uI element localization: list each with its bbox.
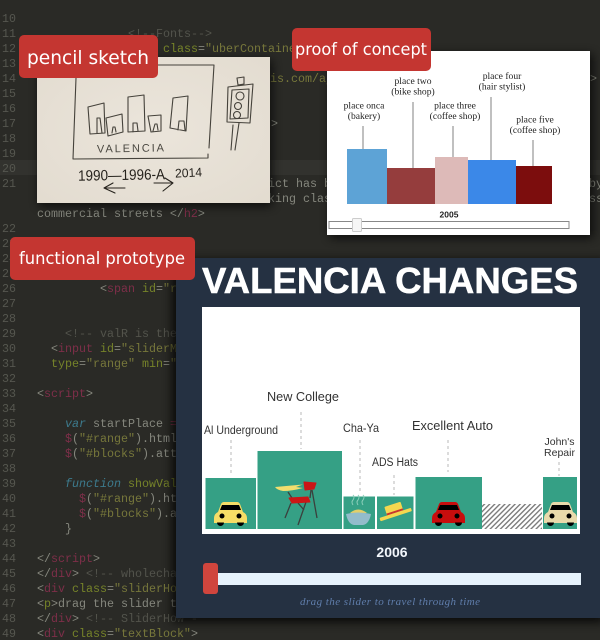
- label: pencil sketch: pencil sketch: [27, 47, 149, 69]
- hatched vacancy: [482, 504, 542, 529]
- panel: pencil sketch: [37, 57, 272, 206]
- icon: cream car: [544, 502, 577, 526]
- line numbers: 47: [2, 597, 16, 611]
- line numbers: 12: [2, 42, 16, 56]
- icon: red car: [432, 502, 465, 526]
- line numbers: 45: [2, 567, 16, 581]
- code text: var startPlace =: [65, 417, 177, 431]
- place labels: (bakery): [348, 111, 380, 122]
- line numbers: 21: [2, 177, 16, 191]
- code text: }: [65, 522, 72, 536]
- label: proof of concept: [292, 28, 431, 71]
- panel: functional prototype: [172, 258, 600, 622]
- code text: <input id="sliderM: [51, 342, 177, 356]
- line numbers: 41: [2, 507, 16, 521]
- line numbers: 11: [2, 27, 16, 41]
- line numbers: 29: [2, 327, 16, 341]
- code text: <p>drag the slider t: [37, 597, 177, 611]
- code text: king clas: [268, 192, 331, 206]
- year label: 2005: [440, 210, 459, 220]
- store labels: Excellent Auto: [412, 418, 493, 433]
- line numbers: 35: [2, 417, 16, 431]
- code text: >: [590, 72, 597, 86]
- line numbers: 16: [2, 102, 16, 116]
- sketch timeline: 1990—1996-A: [78, 166, 165, 185]
- place labels: place two: [394, 76, 432, 87]
- line numbers: 34: [2, 402, 16, 416]
- line numbers: 26: [2, 282, 16, 296]
- title: VALENCIA CHANGES: [202, 260, 578, 301]
- bars: [347, 149, 552, 204]
- line numbers: 30: [2, 342, 16, 356]
- code text: </script>: [37, 552, 100, 566]
- line numbers: 22: [2, 222, 16, 236]
- line numbers: 14: [2, 72, 16, 86]
- leader lines: [363, 97, 533, 168]
- store blocks: [206, 451, 577, 529]
- code text: </div> <!-- wholecha: [37, 567, 177, 581]
- icon: noodle bowl: [346, 495, 371, 525]
- place labels: (coffee shop): [430, 111, 480, 122]
- line numbers: 39: [2, 477, 16, 491]
- code text: function showVal: [65, 477, 177, 491]
- line numbers: 23: [2, 237, 16, 251]
- code text: $("#blocks").att: [65, 447, 177, 461]
- slider caption: drag the slider to travel through time: [300, 596, 480, 608]
- line numbers: 20: [2, 162, 16, 176]
- code text: <!--Fonts-->: [128, 27, 212, 41]
- line numbers: 36: [2, 432, 16, 446]
- place labels: (bike shop): [391, 86, 435, 98]
- line numbers: 15: [2, 87, 16, 101]
- panel: proof of concept: [327, 51, 593, 238]
- place labels: place five: [516, 114, 554, 126]
- year label: 2006: [376, 544, 408, 560]
- line numbers: 10: [2, 12, 16, 26]
- code text: <script>: [37, 387, 93, 401]
- place labels: place four: [483, 71, 522, 82]
- line numbers: 17: [2, 117, 16, 131]
- code text: $("#blocks").a: [79, 507, 177, 521]
- line numbers: 25: [2, 267, 16, 281]
- place labels: place three: [434, 100, 476, 112]
- line numbers: 38: [2, 462, 16, 476]
- slider: [329, 218, 569, 232]
- line numbers: 28: [2, 312, 16, 326]
- sketch traffic light: [227, 77, 253, 150]
- line numbers: 13: [2, 57, 16, 71]
- place labels: [344, 71, 560, 136]
- code text: $("#range").html: [65, 432, 177, 446]
- line numbers: 27: [2, 297, 16, 311]
- line numbers: 46: [2, 582, 16, 596]
- label: functional prototype: [10, 237, 195, 280]
- sketch arrows: [104, 178, 173, 193]
- line numbers: 33: [2, 387, 16, 401]
- code text: <!-- valR is the: [65, 327, 177, 341]
- panel: pencil sketch: 2014: [175, 165, 202, 181]
- line numbers: 42: [2, 522, 16, 536]
- store labels: Al Underground: [204, 423, 278, 437]
- line numbers: 24: [2, 252, 16, 266]
- place labels: (hair stylist): [479, 82, 525, 92]
- code text: is.com/aj: [270, 72, 333, 86]
- place labels: place onca: [344, 100, 385, 112]
- code text: <span id="r: [100, 282, 177, 296]
- code text: commercial streets </h2>: [37, 207, 205, 221]
- line numbers: 18: [2, 132, 16, 146]
- label: pencil sketch: [19, 35, 158, 78]
- code text: ict has b: [268, 177, 331, 191]
- code text: type="range" min=": [51, 357, 177, 371]
- icon: yellow car: [214, 502, 247, 526]
- line numbers: 32: [2, 372, 16, 386]
- sketch buildings: [88, 95, 188, 136]
- line numbers: 37: [2, 447, 16, 461]
- label: proof of concept: proof of concept: [295, 40, 427, 60]
- line numbers: 44: [2, 552, 16, 566]
- icon: school desk chair: [275, 482, 317, 525]
- line numbers: 31: [2, 357, 16, 371]
- label: functional prototype: functional prototype: [19, 249, 185, 269]
- icon: straw hat: [377, 499, 412, 521]
- line numbers: 19: [2, 147, 16, 161]
- line numbers: [2, 12, 16, 640]
- chart: [202, 307, 580, 534]
- code text: <div class="sliderHo: [37, 582, 177, 596]
- sketch frame: [73, 65, 214, 159]
- place labels: (coffee shop): [510, 125, 560, 136]
- store labels: [204, 389, 575, 469]
- line numbers: 48: [2, 612, 16, 626]
- slider: [203, 563, 581, 594]
- code text: </div> <!-- SliderHow -: [37, 612, 198, 626]
- dotted leaders: [231, 412, 559, 495]
- line numbers: 40: [2, 492, 16, 506]
- code text: class="uberContainer": [163, 42, 310, 56]
- line numbers: 43: [2, 537, 16, 551]
- code text: $("#range").ht: [79, 492, 177, 506]
- code text: >: [271, 117, 278, 131]
- sketch label: VALENCIA: [97, 142, 165, 156]
- store labels: John's: [544, 436, 575, 448]
- store labels: ADS Hats: [372, 457, 418, 469]
- store labels: New College: [267, 389, 339, 404]
- store labels: Cha-Ya: [343, 421, 379, 435]
- store labels: Repair: [544, 447, 575, 459]
